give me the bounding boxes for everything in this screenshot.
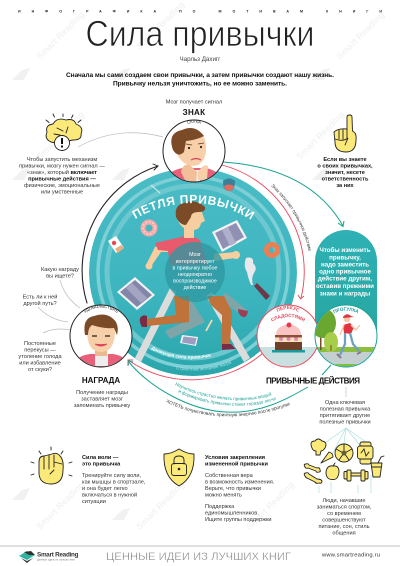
text: willpower: это привычка: [82, 462, 121, 468]
text: willpower: и она будет легко: [82, 486, 128, 492]
people text: общения: [332, 530, 356, 536]
arrow arc: black, reward to cue: [82, 164, 158, 303]
face circle: reward: УДОВОЛЬСТВИЕ: [84, 306, 118, 313]
arc label: cue triggers routine: Знак запускает привычное действие: [272, 184, 311, 251]
grey back legs: [165, 292, 248, 339]
shoe: left: [140, 315, 147, 327]
text: willpower: Тренируйте силу воли,: [82, 472, 141, 479]
question: another way: другой путь?: [23, 300, 57, 307]
reward text: Получение награды: [76, 390, 128, 396]
people text: заниматься спортом,: [317, 504, 372, 510]
cigarette: [254, 283, 270, 300]
text: willpower: включаться в нужной: [82, 492, 137, 498]
hand: left: [146, 262, 152, 270]
people text: [317, 498, 372, 536]
keystone text: притягивает другие: [320, 413, 370, 419]
text: conditions: в возможность изменения.: [205, 480, 275, 486]
text: cue explanation: привычные действия —: [28, 176, 96, 182]
capsule text: надо заместить: [321, 262, 369, 268]
text: responsibility: [317, 157, 373, 189]
icon: smart watch: [358, 442, 373, 464]
centre text: [173, 252, 218, 291]
centre text: воспроизводимое: [173, 278, 217, 284]
arrow arc: green, cue to capsule: [223, 162, 344, 226]
text: willpower: [82, 455, 146, 505]
connectors: questions to reward: [38, 280, 80, 333]
question: another way: [23, 294, 57, 307]
keystone text: Одна ключевая: [325, 400, 365, 406]
capsule: change habit: [315, 230, 377, 367]
keystone text: полезные привычки: [319, 420, 371, 426]
keystone text: полезная привычка: [320, 406, 371, 412]
neck: [184, 228, 194, 238]
text: responsibility: ответственность: [322, 176, 369, 182]
beam: left: [135, 288, 176, 362]
text: conditions: можно менять: [205, 492, 242, 498]
author: Чарльз Дахигг: [180, 56, 221, 63]
tablet: upper right: [212, 220, 247, 252]
text: cue explanation: или умственные: [41, 190, 83, 196]
text: Smart Reading: [34, 109, 86, 161]
hair: [176, 201, 205, 225]
centre text: неоднократно: [178, 272, 212, 278]
cigarette pack: [108, 236, 124, 253]
question: snacks: перекусы —: [24, 348, 56, 354]
icon: dumbbell: [344, 470, 368, 481]
top cigarette: [151, 185, 160, 193]
face circle: cake snack: [256, 304, 317, 368]
smoke: [245, 258, 256, 285]
question: snacks: или избавление: [19, 360, 61, 366]
shoe: right: [222, 344, 236, 350]
cue caption: Мозг получает сигнал: [166, 100, 222, 106]
text: conditions: Условия закрепления: [205, 455, 265, 461]
centre text: действие: [184, 284, 206, 291]
arm: right: [214, 252, 235, 261]
intro text: Привычку нельзя уничтожить, но ее можно заменить.: [113, 80, 287, 88]
people text: Люди, начавшие: [322, 498, 366, 504]
reward heading: НАГРАДА: [82, 376, 120, 385]
text: cue explanation: [19, 157, 105, 196]
icon: broccoli: [311, 439, 326, 455]
orange leg: left: [147, 296, 189, 326]
icon: ball: [335, 444, 353, 462]
donut: orange: [266, 244, 278, 256]
face circle: cake snack: СЛАДОСТЯМИ: [271, 314, 306, 322]
head: [178, 212, 205, 230]
text: Smart Reading: [134, 0, 186, 51]
text: conditions: Ищите группы поддержки: [205, 517, 272, 523]
ring label: craving: Страстное желание награды: [176, 361, 232, 371]
tablet: left: [117, 277, 155, 310]
intro text: Сначала мы сами создаем свои привычки, а затем привычки создают нашу жизнь.: [66, 72, 334, 79]
text: cue explanation: привычки, мозгу нужен сигнал —: [19, 164, 105, 170]
arrow arc: red, action to reward: [128, 353, 263, 380]
footer slogan: ЦЕННЫЕ ИДЕИ ИЗ ЛУЧШИХ КНИГ: [106, 551, 291, 563]
arm: left: [147, 246, 168, 265]
capsule text: оставив прежними: [316, 283, 374, 290]
text: responsibility: Если вы знаете: [323, 157, 367, 163]
face circle: cue: [162, 120, 226, 182]
people text: совершенствуют: [322, 518, 366, 524]
face circle: reward: [70, 304, 132, 368]
connector: brain to cue: [78, 133, 163, 147]
text: cue explanation: физические, эмоциональные: [24, 183, 100, 189]
face circle: cake snack: ПЕРЕКУС: [276, 306, 300, 312]
capsule text: Чтобы изменить: [319, 247, 371, 254]
text: responsibility: значит, несете: [325, 170, 365, 176]
donut: pink: [143, 222, 155, 234]
face circle: walk: ПРОГУЛКА: [333, 307, 358, 314]
text: Smart Reading: [34, 9, 86, 61]
footer logo: [19, 551, 79, 563]
ring label: driving force: Движущая сила привычки: [150, 346, 211, 360]
question: another way: Есть ли к ней: [23, 294, 57, 300]
arc label: teal line 2: и формировать привычки станет гораздо легче: [178, 390, 276, 406]
text: Smart Reading: [244, 479, 296, 531]
text: Smart Reading: [294, 109, 346, 161]
hand: right: [232, 251, 240, 259]
text: Smart Reading: [334, 9, 386, 61]
text: willpower: ситуации: [82, 499, 106, 505]
text: conditions: Верьте, что привычки: [205, 486, 261, 492]
text: conditions: единомышленников.: [205, 510, 259, 516]
arrow arc: green, action to reward: [128, 361, 331, 412]
title: Сила привычки: [86, 13, 314, 54]
question: what reward: вы ищете?: [46, 274, 74, 280]
footer logo: Smart Reading: [37, 552, 79, 558]
people text: со временем: [327, 511, 361, 517]
capsule text: [316, 247, 374, 298]
icon: carrot: [321, 452, 333, 463]
icon: pointing hand: [334, 115, 356, 152]
intro text: [66, 72, 334, 88]
small cigarette: [206, 320, 212, 331]
question: snacks: от скуки?: [28, 367, 52, 373]
arc label: dark line: ХОТЕТЬ почувствовать приятную энергию после прогулки: [166, 399, 290, 418]
wine glass: [223, 178, 235, 191]
arrow arc: red, cue to action: [222, 165, 304, 299]
big teal loop circle: [89, 168, 297, 376]
icon: fist: [31, 447, 72, 484]
cue heading: ЗНАК: [183, 108, 205, 117]
question: snacks: [18, 341, 62, 373]
capsule text: знаки и награды: [320, 290, 370, 298]
routine heading: ПРИВЫЧНЫЕ ДЕЙСТВИЯ: [266, 376, 360, 386]
text: cue explanation: Чтобы запустить механизм: [27, 157, 97, 163]
wine shoe: [238, 309, 248, 317]
question: what reward: [41, 267, 79, 280]
keystone text: [319, 400, 371, 426]
beam: right: [206, 292, 250, 362]
text: conditions: Собственная вера: [205, 473, 254, 479]
face circle: cue: СКУКА: [187, 120, 201, 124]
brain circle in centre: [165, 242, 225, 302]
footer url: www.smartreading.ru: [321, 552, 380, 558]
capsule text: одно привычное: [319, 268, 371, 276]
reward text: заставляет мозг: [81, 396, 123, 402]
question: what reward: Какую награду: [41, 267, 79, 273]
question: snacks: утоление голода: [18, 354, 62, 360]
text: Smart Reading: [34, 479, 86, 531]
footer logo: Ценные идеи из лучших книг: [37, 558, 75, 562]
text: conditions: Поддержка: [205, 504, 235, 510]
icon: apple: [326, 463, 339, 480]
text: willpower: Сила воли —: [82, 455, 119, 461]
text: cue explanation: «знак», который включает: [27, 169, 97, 176]
text: Smart Reading: [134, 479, 186, 531]
shirt: [155, 235, 208, 265]
text: responsibility: о своих привычках,: [317, 164, 373, 170]
icon: bones: [304, 464, 322, 483]
centre text: интерпретирует: [176, 259, 215, 265]
orange leg: right: [207, 296, 232, 344]
header line: ИНФОГРАФИКА ПО МОТИВАМ КНИГИ: [18, 10, 382, 14]
text: willpower: как мышцы в спортзале,: [82, 480, 146, 486]
text: conditions: измененной привычки: [205, 460, 268, 468]
centre text: в привычку любое: [173, 266, 218, 272]
icon: shield lock: [164, 449, 194, 486]
reward text: запоминать привычку: [74, 403, 130, 409]
people text: питание, сон, стиль: [318, 524, 370, 530]
rays: habit connections: [319, 428, 372, 493]
loop heading: ПЕТЛЯ ПРИВЫЧКИ: [132, 194, 255, 220]
text: responsibility: за них: [336, 183, 355, 189]
tablet: small bottom: [180, 335, 198, 346]
capsule text: привычку,: [329, 254, 361, 262]
text: conditions: [205, 455, 275, 523]
reward text: [74, 390, 130, 409]
icon: brain alert: [46, 114, 82, 150]
capsule text: действие другим,: [318, 276, 372, 282]
question: snacks: Постоянные: [24, 341, 56, 347]
face circle: walk: [314, 304, 378, 368]
icon: drink glass: [371, 456, 384, 477]
centre text: Мозг: [189, 252, 201, 258]
arc label: teal line 1: Научитесь страстно желать привычных вещей: [175, 382, 272, 402]
keystone connector: [345, 387, 347, 397]
